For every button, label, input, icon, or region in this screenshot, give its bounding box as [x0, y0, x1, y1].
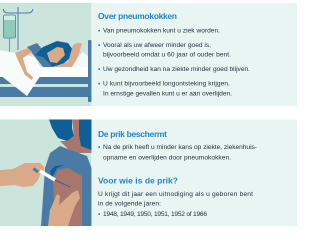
text block: U krijgt dit jaar een uitnodiging als u geboren bent	[98, 191, 253, 198]
bullet: Na de prik heeft u minder kans op ziekte, ziekenhuis-	[103, 144, 257, 151]
bullet list: Uw gezondheid kan na ziekte minder goed blijven.	[103, 66, 250, 73]
bullet list: Vooral als uw afweer minder goed is,	[103, 42, 211, 49]
panel: de prik beschermt	[0, 120, 297, 226]
bullet list: bijvoorbeeld omdat u 60 jaar of ouder bent.	[103, 52, 231, 58]
bed frame	[0, 40, 92, 102]
illustration: patient in hospital bed	[0, 3, 92, 106]
text block: in de volgende jaren:	[98, 200, 161, 208]
bullet list: Van pneumokokken kunt u ziek worden.	[103, 27, 220, 34]
illustration: vaccination	[0, 120, 92, 226]
bullet list: •	[98, 42, 101, 49]
text block: •	[98, 211, 101, 218]
patient hand	[48, 190, 80, 226]
bullet list	[98, 27, 250, 97]
upper arm	[53, 168, 82, 226]
patient arm	[15, 48, 33, 80]
heading: De prik beschermt	[98, 129, 167, 139]
bullet list: •	[98, 27, 101, 34]
panel: over pneumokokken	[0, 3, 297, 106]
bullet list: •	[98, 80, 101, 88]
heading: Voor wie is de prik?	[98, 176, 178, 186]
bullet	[98, 144, 257, 162]
text block: 1948, 1949, 1950, 1951, 1952 of 1966	[103, 211, 207, 218]
syringe	[34, 168, 70, 187]
text block	[98, 191, 253, 218]
blanket	[0, 50, 43, 96]
bullet list: U kunt bijvoorbeeld longontsteking krijgen.	[103, 80, 230, 88]
hair	[49, 120, 74, 141]
shirt	[41, 146, 92, 226]
patient	[27, 41, 82, 67]
nurse hand	[0, 163, 45, 187]
pillow	[70, 52, 88, 67]
bullet: opname en overlijden door pneumokokken.	[103, 154, 231, 162]
bullet: •	[98, 144, 101, 151]
shirt fold	[50, 165, 65, 178]
bullet list: In ernstige gevallen kunt u er aan overlijden.	[103, 90, 232, 98]
heading: Over pneumokokken	[98, 11, 177, 21]
beard	[79, 120, 92, 150]
neck	[60, 120, 92, 153]
icon: infusion stand and bag	[3, 7, 33, 65]
bullet list: •	[98, 66, 101, 73]
